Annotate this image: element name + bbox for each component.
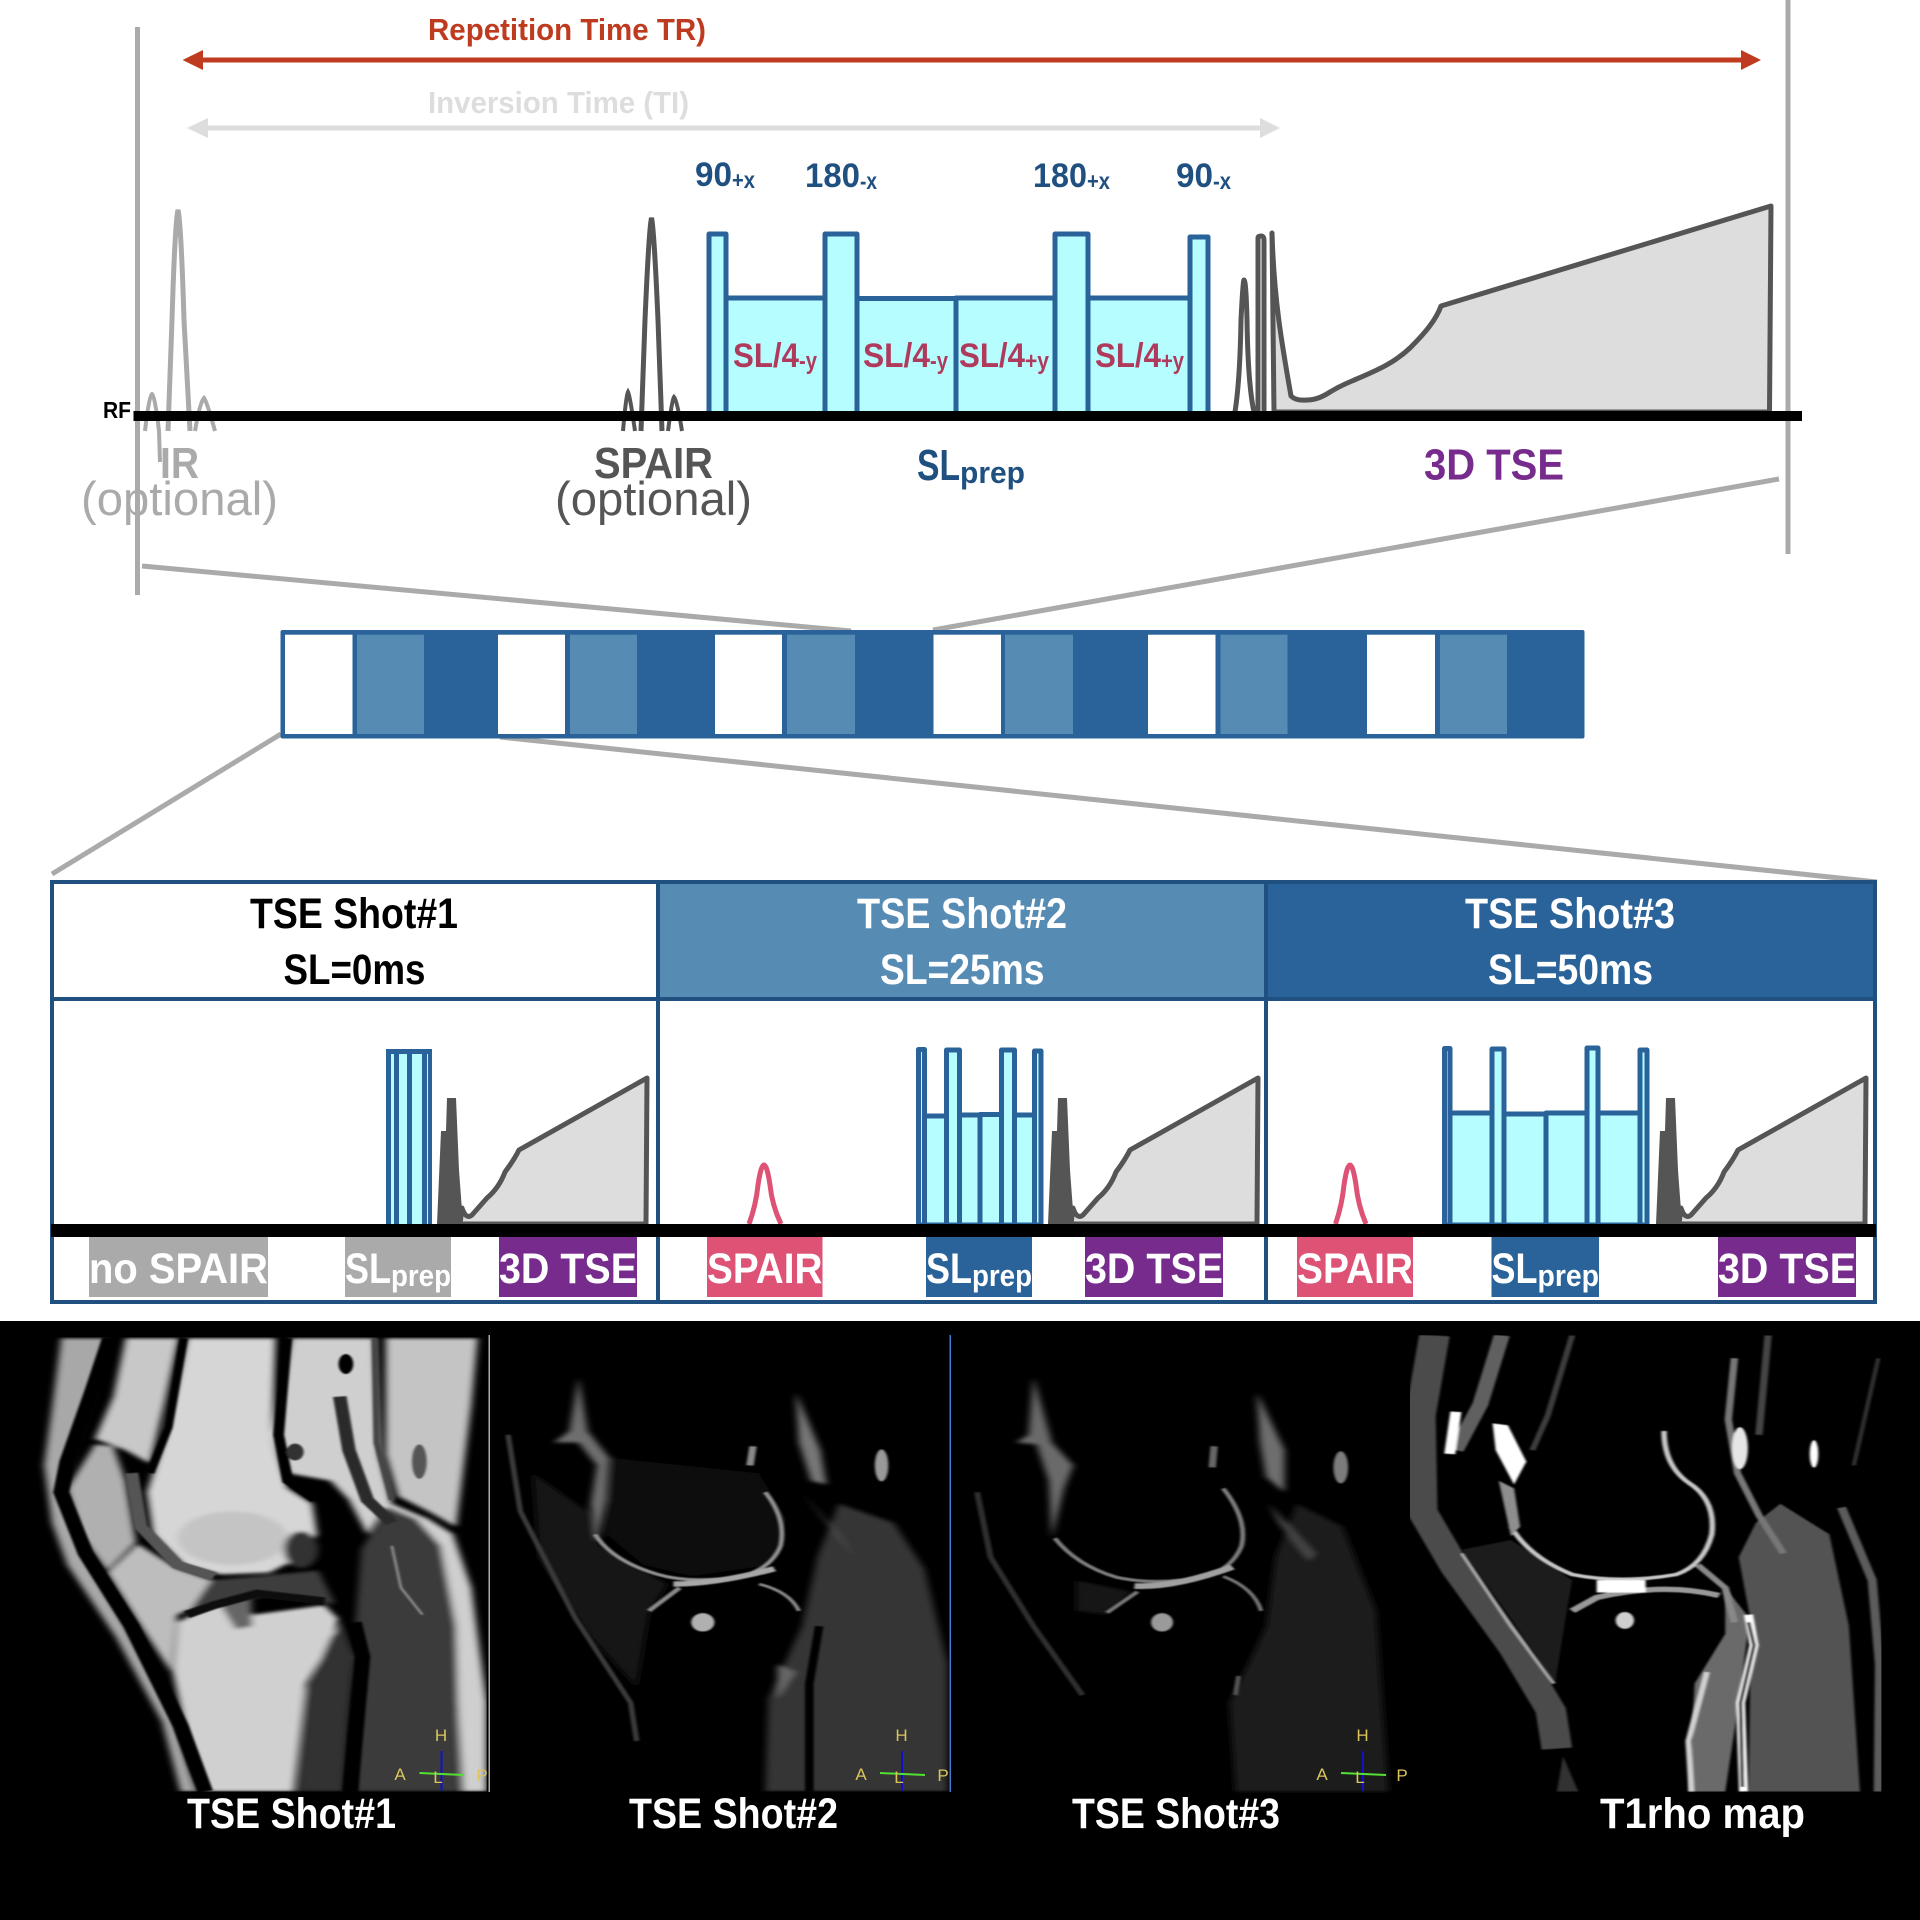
header text: shot 3: TSE Shot#3: [1465, 890, 1675, 938]
orientation marker: shot 2: L: [894, 1768, 904, 1787]
header text: shot 2: SL=25ms: [880, 946, 1044, 994]
table grid: [52, 882, 1875, 1302]
tags: shot 1: SL: [345, 1245, 391, 1293]
tags: shot 2: [707, 1237, 1223, 1297]
caption: TSE shot 2: TSE Shot#2: [629, 1790, 838, 1838]
mini diagram: shot 3: [1336, 1048, 1866, 1225]
label: IR optional: [81, 439, 278, 525]
tags: shot 1: prep: [391, 1258, 451, 1293]
module tags: [89, 1237, 1856, 1297]
spin-lock labels: [733, 337, 1185, 375]
tags: shot 3: SL: [1492, 1245, 1538, 1293]
header text: shot 3: SL=50ms: [1488, 946, 1653, 994]
tags: shot 2: SPAIR: [707, 1245, 822, 1293]
strip background: [280, 630, 1584, 738]
pulses: excitation and refocusing: [1235, 236, 1264, 412]
arrow: inversion time: [187, 118, 1280, 138]
zoom connector lines to shot strip: [52, 479, 1877, 882]
orientation marker: shot 1: A: [394, 1765, 406, 1784]
pulse labels: 180: [805, 157, 860, 195]
heading: repetition time: Repetition Time TR): [428, 12, 706, 47]
tags: shot 3: prep: [1538, 1258, 1599, 1293]
image separator 1: [488, 1335, 490, 1792]
orientation marker: shot 2: H: [895, 1726, 908, 1745]
header text: shot 2: TSE Shot#2: [857, 890, 1067, 938]
pulse labels: -x: [860, 168, 877, 194]
tags: shot 1: no SPAIR: [89, 1245, 268, 1293]
caption: TSE shot 3: TSE Shot#3: [1072, 1790, 1280, 1838]
mini diagram: shot 1: [386, 1049, 647, 1225]
orientation marker: shot 3: L: [1355, 1768, 1365, 1787]
TR boundary line right: [1786, 0, 1790, 554]
orientation marker: shot 1: [394, 1726, 488, 1791]
tags: shot 3: SPAIR: [1297, 1245, 1413, 1293]
MRI image: TSE shot 3 knee: [977, 1377, 1389, 1791]
SL prep spin-lock pulses: [709, 234, 1208, 415]
orientation marker: shot 2: P: [937, 1766, 949, 1785]
spin-lock labels: -y: [799, 348, 818, 375]
header cell: shot 1: [52, 882, 658, 999]
panel: repeating TSE shot strip: [280, 630, 1584, 738]
spin-lock labels: SL/4: [863, 337, 930, 375]
spin-lock labels: +y: [1161, 348, 1185, 375]
pulse labels: [695, 156, 1231, 195]
spin-lock labels: SL/4: [733, 337, 799, 375]
MRI image: TSE shot 2 knee: [508, 1377, 948, 1791]
label: SPAIR optional: (optional): [555, 472, 752, 525]
orientation marker: shot 3: H: [1356, 1726, 1369, 1745]
pulse labels: 90: [695, 156, 732, 194]
pulse: IR (optional): [145, 210, 215, 462]
orientation marker: shot 3: [1316, 1726, 1408, 1791]
pulse labels: 90: [1176, 157, 1213, 195]
pulse: SPAIR (optional): [623, 218, 682, 431]
panel: TSE shots table: [51, 882, 1876, 1302]
orientation marker: shot 3: P: [1396, 1766, 1408, 1785]
header cell: shot 2: [658, 882, 1266, 999]
TR boundary line left: [135, 27, 140, 595]
panel: MRI images: [0, 1321, 1920, 1920]
label: 3D TSE: 3D TSE: [1424, 440, 1564, 490]
header cell: shot 3: [1266, 882, 1875, 999]
axis label: RF: RF: [103, 397, 131, 423]
header text: shot 2: [857, 890, 1067, 994]
spin-lock labels: SL/4: [1095, 337, 1161, 375]
pulse labels: +x: [1087, 168, 1110, 194]
pulse labels: -x: [1213, 168, 1231, 194]
header text: shot 1: TSE Shot#1: [250, 890, 458, 938]
label: SL prep: [917, 441, 1025, 490]
mini diagram: shot 2: [749, 1050, 1258, 1225]
black background: [0, 1321, 1920, 1920]
tags: shot 3: [1297, 1237, 1856, 1297]
label: SL prep: SL: [917, 441, 960, 490]
MRI image: TSE shot 1 knee: [44, 1338, 487, 1791]
orientation marker: shot 1: P: [476, 1766, 488, 1785]
label: SPAIR optional: [555, 439, 752, 525]
pulse labels: 180: [1033, 157, 1087, 195]
baseline: RF axis: [134, 411, 1802, 421]
caption: T1rho map: T1rho map: [1600, 1790, 1805, 1838]
header text: shot 3: [1465, 890, 1675, 994]
panel: pulse sequence diagram: [81, 0, 1802, 595]
label: IR optional: (optional): [81, 472, 278, 525]
spin-lock labels: SL/4: [959, 337, 1025, 375]
label: SL prep: prep: [960, 455, 1025, 490]
orientation marker: shot 3: A: [1316, 1765, 1328, 1784]
spin-lock labels: -y: [930, 348, 949, 375]
orientation marker: shot 2: A: [855, 1765, 867, 1784]
strip segments: [285, 635, 1507, 734]
caption: TSE shot 1: TSE Shot#1: [187, 1790, 396, 1838]
label: SPAIR optional: SPAIR: [594, 439, 713, 488]
pulse labels: +x: [732, 167, 755, 193]
MRI image: T1rho map: [1420, 1335, 1880, 1791]
black baseline: [51, 1224, 1876, 1237]
orientation marker: shot 1: H: [435, 1726, 447, 1745]
tags: shot 3: 3D TSE: [1718, 1245, 1856, 1293]
spin-lock labels: +y: [1025, 348, 1050, 375]
heading: inversion time: Inversion Time (TI): [428, 85, 689, 120]
tags: shot 1: [89, 1237, 637, 1297]
arrow: repetition time: [182, 50, 1761, 70]
orientation marker: shot 1: L: [433, 1768, 443, 1787]
label: IR optional: IR: [160, 439, 199, 488]
image separator 2: [950, 1335, 951, 1792]
tags: shot 2: 3D TSE: [1085, 1245, 1223, 1293]
tags: shot 1: 3D TSE: [499, 1245, 637, 1293]
header text: shot 1: SL=0ms: [284, 946, 426, 994]
header text: shot 1: [250, 890, 458, 994]
waveform: 3D TSE echo train: [1272, 206, 1771, 412]
tags: shot 2: SL: [926, 1245, 972, 1293]
orientation marker: shot 2: [855, 1726, 949, 1791]
tags: shot 2: prep: [972, 1258, 1032, 1293]
